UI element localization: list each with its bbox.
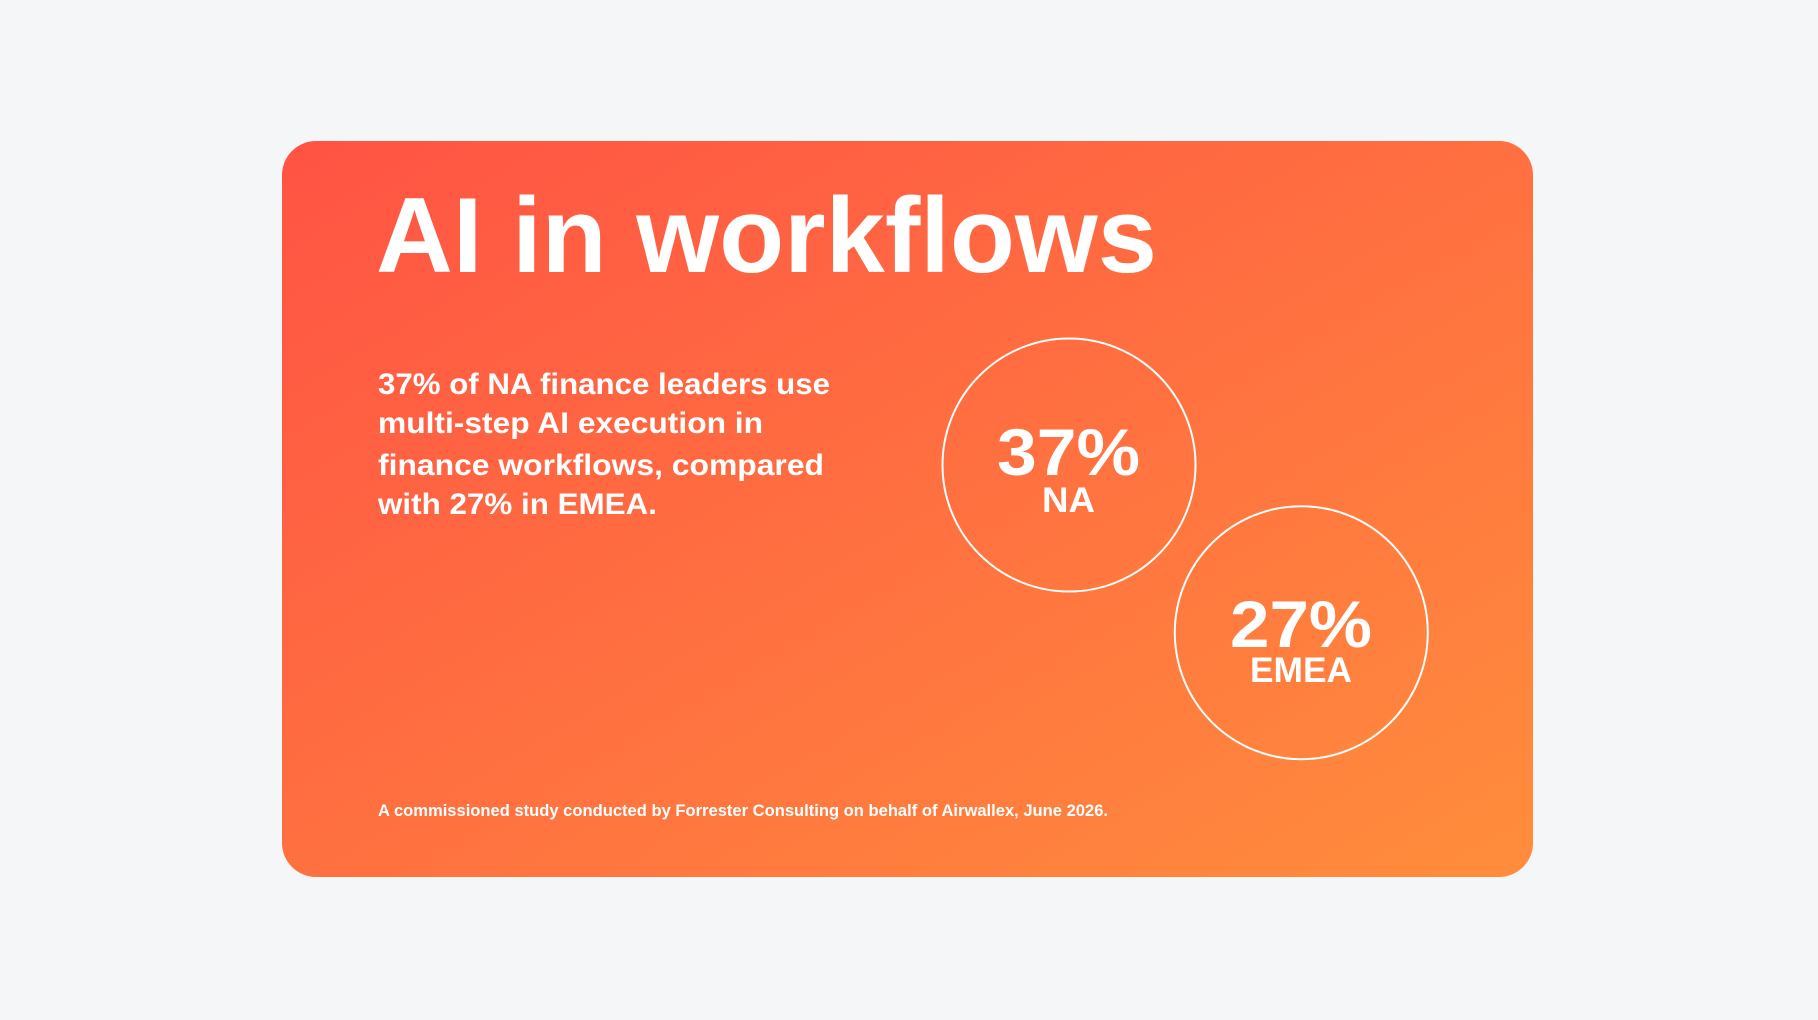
text block: description xyxy=(377,368,830,521)
text block: description: 37% of NA finance leaders use xyxy=(378,368,830,401)
panel: gradient card xyxy=(282,141,1533,877)
stat circle: EMEA 27% xyxy=(1175,506,1428,759)
stat value: 37%: 37% xyxy=(997,415,1140,489)
text block: description: with 27% in EMEA. xyxy=(377,488,657,521)
text block: description: finance workflows, compared xyxy=(378,449,824,482)
stat value: 27%: 27% xyxy=(1230,587,1372,661)
stat label: NA: NA xyxy=(1042,481,1095,520)
footnote: A commissioned study conducted by Forrester Consulting on behalf of Airwallex, June 2026. xyxy=(378,801,1108,820)
text block: description: multi-step AI execution in xyxy=(378,407,763,440)
stat circle: NA 37% xyxy=(942,338,1196,592)
stat label: EMEA: EMEA xyxy=(1250,651,1352,690)
title: AI in workflows xyxy=(376,175,1157,295)
